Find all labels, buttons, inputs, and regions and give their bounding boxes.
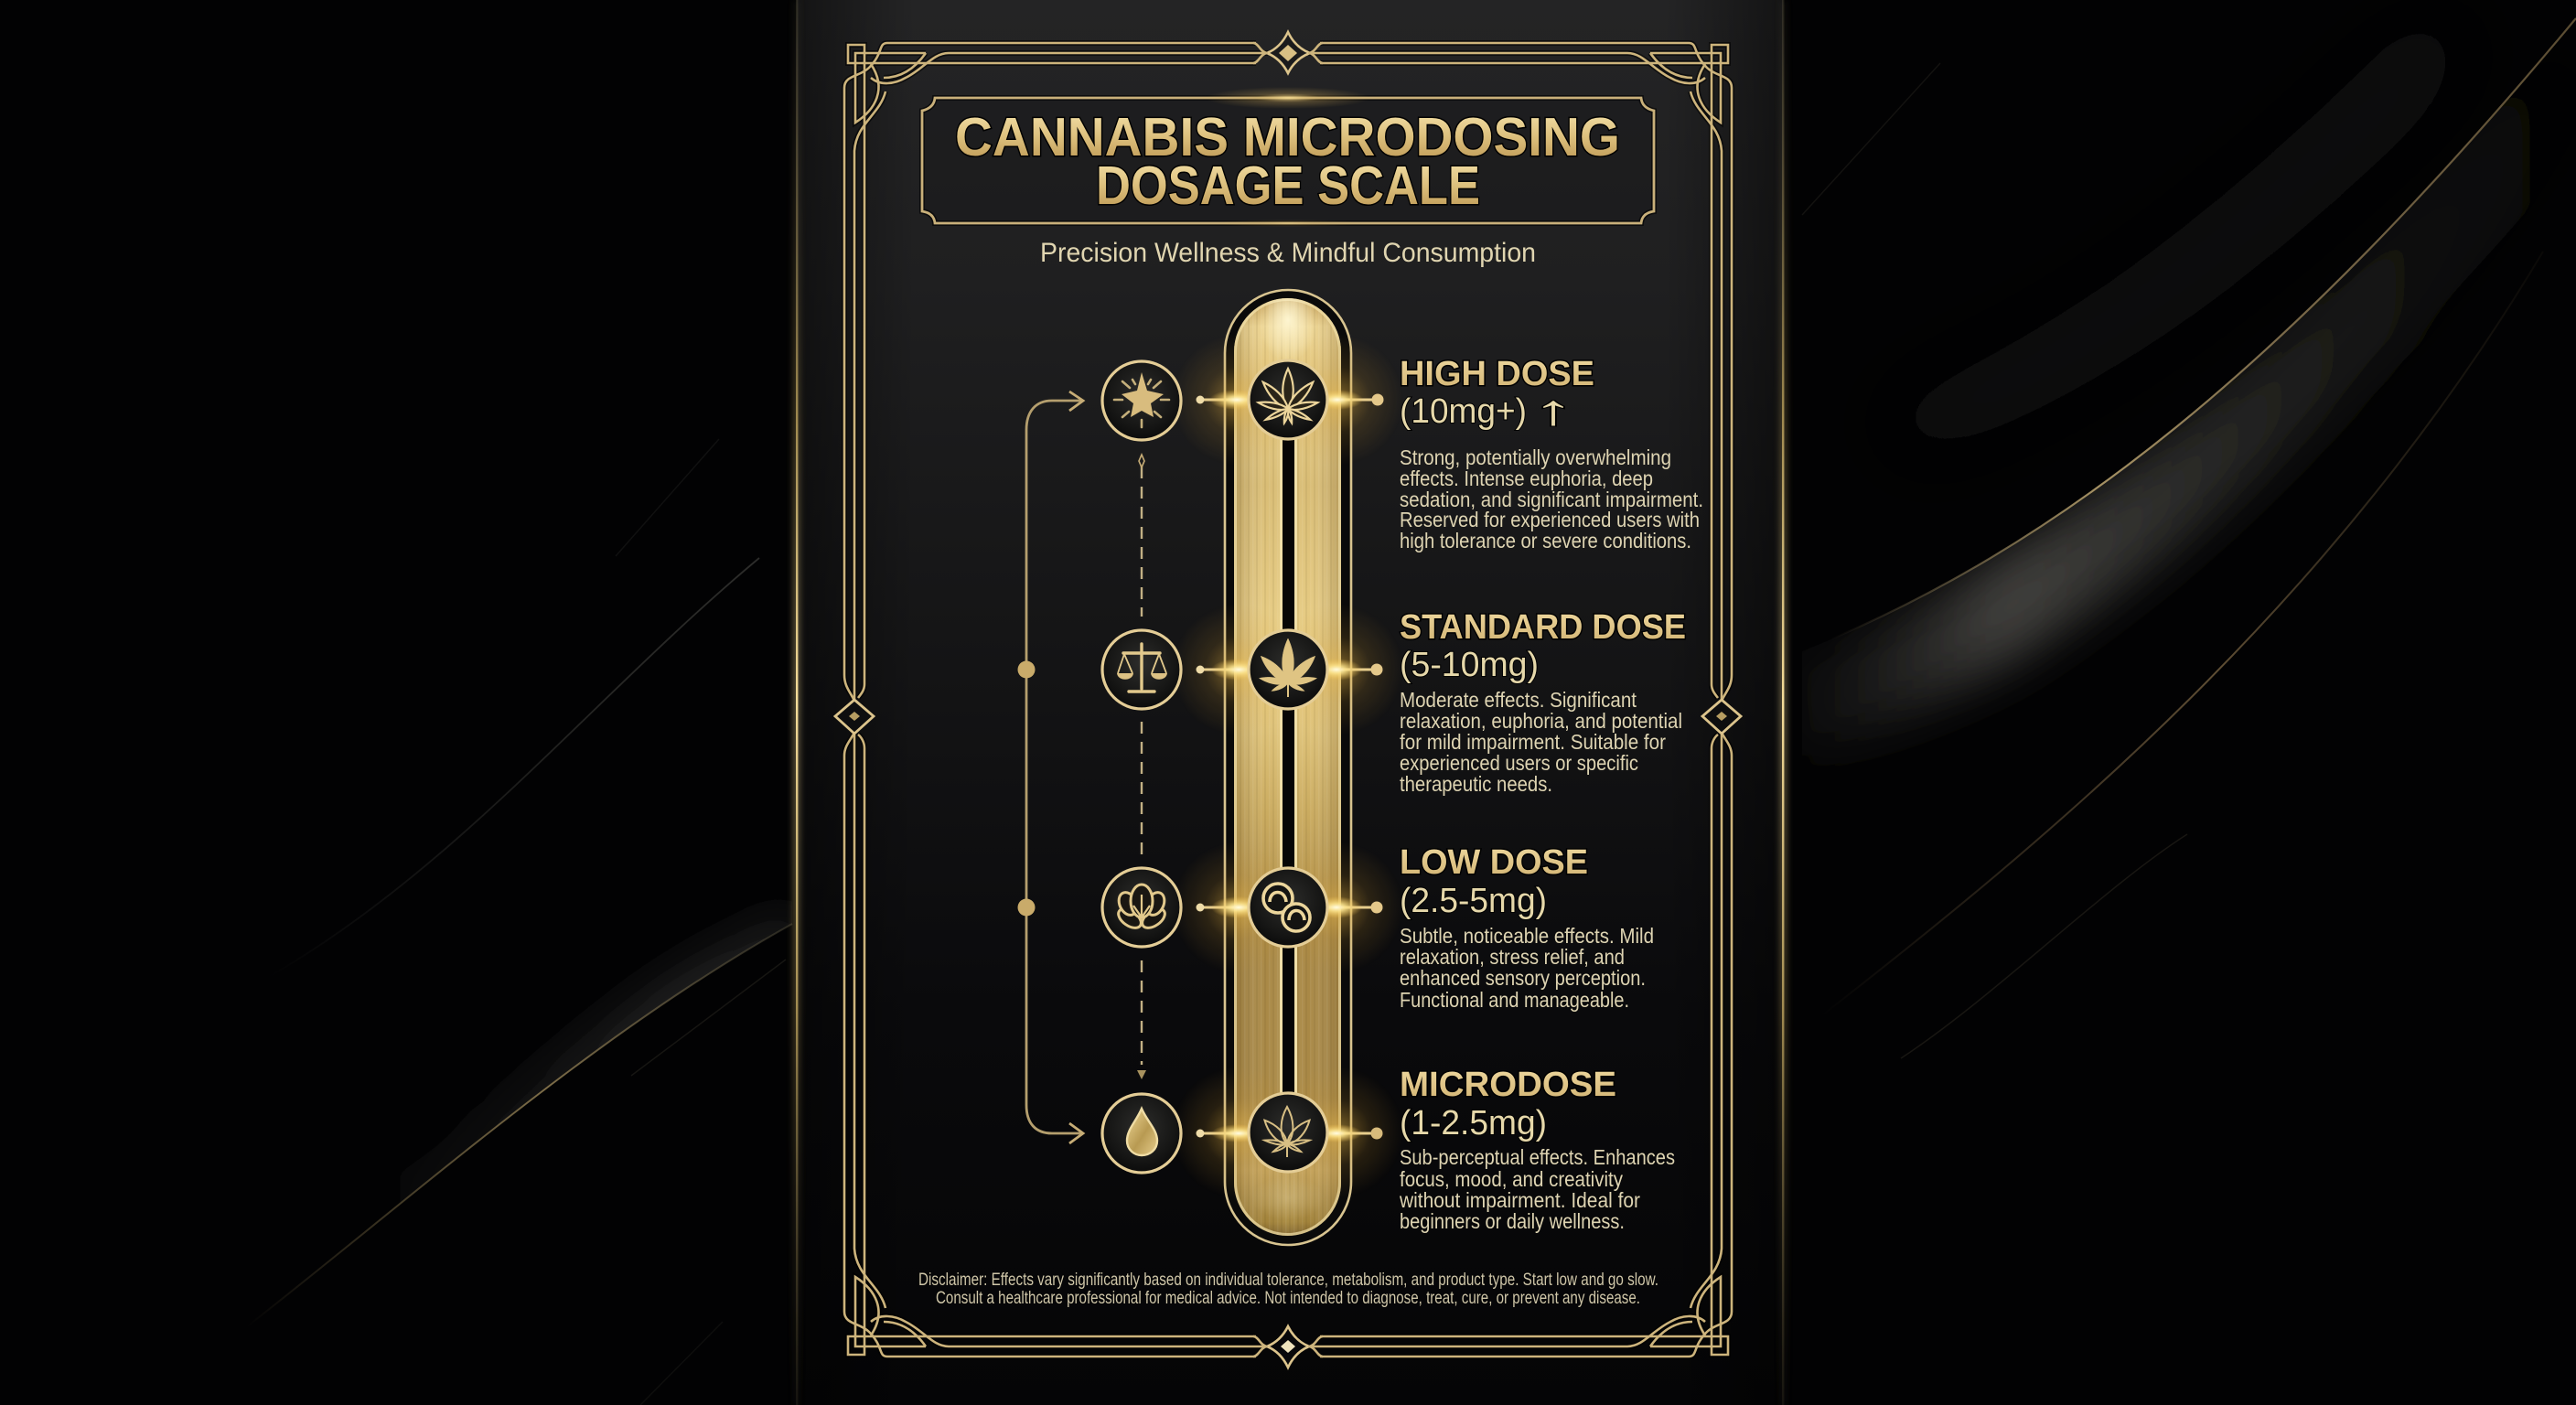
label: microdose: without impairment. Ideal for bbox=[1399, 1188, 1640, 1212]
label: microdose: focus, mood, and creativity bbox=[1400, 1167, 1623, 1191]
label: standard dose: STANDARD DOSE bbox=[1400, 608, 1686, 647]
label: high dose: Reserved for experienced users with bbox=[1400, 508, 1700, 531]
level: microdose bbox=[1102, 1066, 1675, 1233]
label: low dose: relaxation, stress relief, and bbox=[1400, 945, 1625, 969]
icon: burst star bbox=[1102, 361, 1181, 440]
frame ornament: right diamond bbox=[1702, 700, 1741, 734]
label: standard dose: for mild impairment. Suitable for bbox=[1400, 730, 1666, 754]
dashed connectors between side icons bbox=[1137, 455, 1146, 1079]
art deco gold frame bbox=[835, 32, 1741, 1367]
label: microdose: Sub-perceptual effects. Enhances bbox=[1400, 1145, 1675, 1169]
disclaimer: Consult a healthcare professional for medical advice. Not intended to diagnose, treat, cure, or prevent any disease. bbox=[936, 1288, 1640, 1308]
label: high dose: effects. Intense euphoria, deep bbox=[1400, 467, 1653, 490]
label: high dose: sedation, and significant impairment. bbox=[1400, 488, 1703, 511]
title text bbox=[955, 107, 1620, 216]
icon: leaf cluster bbox=[1102, 868, 1181, 947]
label: low dose: Subtle, noticeable effects. Mild bbox=[1400, 924, 1654, 948]
label: standard dose: Moderate effects. Significant bbox=[1400, 688, 1637, 712]
label: low dose: (2.5-5mg) bbox=[1400, 882, 1547, 920]
label: high dose: Strong, potentially overwhelming bbox=[1400, 445, 1671, 469]
side bracket with arrows bbox=[1017, 391, 1083, 1143]
title text: DOSAGE SCALE bbox=[1096, 156, 1480, 216]
glow and connector: high bbox=[1172, 334, 1403, 466]
label: standard dose: (5-10mg) bbox=[1400, 646, 1539, 684]
label: standard dose: experienced users or specific bbox=[1400, 751, 1638, 775]
label: high dose bbox=[1400, 355, 1703, 552]
disclaimer: Disclaimer: Effects vary significantly based on individual tolerance, metabolism, and product type. Start low and go slow. bbox=[918, 1270, 1658, 1290]
label: standard dose: relaxation, euphoria, and potential bbox=[1400, 709, 1682, 733]
icon: cannabis leaf solid bbox=[1249, 630, 1327, 709]
level: high dose bbox=[1102, 334, 1703, 552]
frame ornament: top diamond bbox=[1253, 32, 1323, 73]
central channel bbox=[1280, 412, 1297, 1134]
icon: paired rings bbox=[1249, 868, 1327, 947]
label: microdose bbox=[1399, 1066, 1675, 1233]
level: low dose bbox=[1102, 842, 1654, 1012]
poster panel bbox=[794, 0, 1786, 1405]
label: microdose: beginners or daily wellness. bbox=[1400, 1209, 1625, 1233]
icon: oil drop bbox=[1102, 1094, 1181, 1173]
label: microdose: (1-2.5mg) bbox=[1400, 1104, 1547, 1142]
label: low dose: Functional and manageable. bbox=[1400, 988, 1629, 1012]
label: high dose: high tolerance or severe conditions. bbox=[1400, 529, 1691, 552]
label: high dose: ↑ bbox=[1532, 386, 1574, 434]
title plaque bbox=[922, 87, 1654, 227]
label: low dose: enhanced sensory perception. bbox=[1400, 966, 1646, 990]
icon: balance scales bbox=[1102, 630, 1181, 709]
label: low dose bbox=[1400, 843, 1654, 1012]
label: microdose: MICRODOSE bbox=[1400, 1066, 1616, 1104]
right background sweep bbox=[1784, 18, 2576, 1058]
level: standard dose bbox=[1102, 604, 1686, 796]
label: standard dose bbox=[1400, 608, 1686, 796]
gold capsule scale bbox=[1225, 278, 1351, 1245]
title text: CANNABIS MICRODOSING bbox=[955, 107, 1620, 167]
glow and connector: standard bbox=[1172, 604, 1403, 735]
frame ornament: bottom diamond bbox=[1253, 1326, 1323, 1367]
icon: cannabis leaf outline bbox=[1249, 360, 1327, 439]
disclaimer bbox=[918, 1270, 1658, 1308]
label: high dose: (10mg+) bbox=[1400, 392, 1527, 431]
subtitle: Precision Wellness & Mindful Consumption bbox=[1040, 238, 1536, 268]
label: low dose: LOW DOSE bbox=[1400, 843, 1588, 882]
icon: cannabis leaf thin bbox=[1249, 1093, 1327, 1172]
glow and connector: micro bbox=[1172, 1067, 1403, 1198]
frame ornament: left diamond bbox=[835, 700, 874, 734]
label: standard dose: therapeutic needs. bbox=[1400, 772, 1552, 796]
label: high dose: HIGH DOSE bbox=[1400, 355, 1594, 393]
glow and connector: low bbox=[1172, 842, 1403, 973]
left background sweep bbox=[246, 439, 805, 1405]
